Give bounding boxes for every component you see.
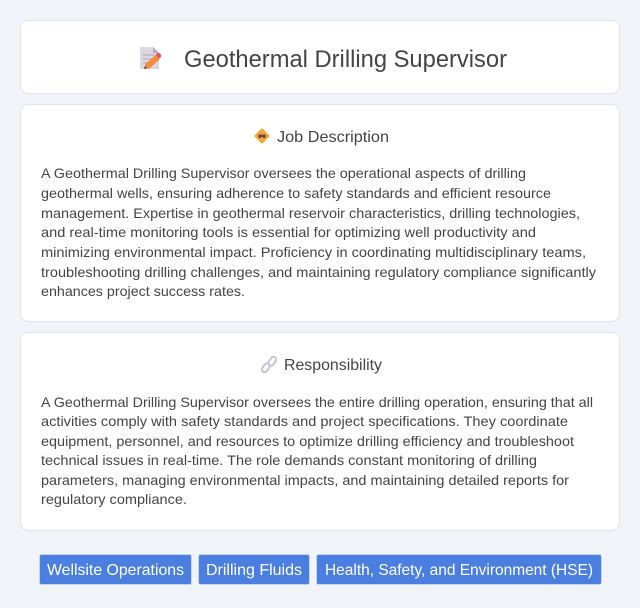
text block: job description: geothermal wells, ensuring adherence to safety standards and efficient resource [41, 185, 551, 201]
icon: document with pencil [140, 47, 161, 69]
text block: responsibility: regulatory compliance. [41, 491, 187, 507]
tag: drilling fluids [198, 554, 310, 584]
panel: responsibility [20, 332, 620, 530]
tag: health, safety, and environment: Health, Safety, and Environment (HSE) [325, 562, 593, 579]
text block: job description: and real-time monitoring tools is essential for optimizing well productivity and [41, 224, 536, 240]
text block: responsibility: equipment, personnel, and resources to optimize drilling efficiency and troubleshoot [41, 433, 574, 449]
icon: chain link [261, 356, 277, 373]
text block: job description [41, 165, 596, 299]
icon: orange diamond [254, 128, 270, 144]
tag: wellsite operations: Wellsite Operations [47, 562, 184, 579]
text block: job description: enhances project success rates. [41, 283, 245, 299]
text block: responsibility: technical issues in real-time. The role demands constant monitoring of drilling [41, 452, 537, 468]
panel: title header [20, 20, 620, 94]
text block: responsibility: A Geothermal Drilling Supervisor oversees the entire drilling operation, ensuring that all [41, 394, 593, 410]
text block: job description: minimizing environmental impact. Proficiency in coordinating multidisciplinary teams, [41, 244, 586, 260]
tag: wellsite operations [40, 554, 192, 584]
title: Geothermal Drilling Supervisor [184, 46, 507, 73]
text block: responsibility: parameters, managing environmental impacts, and maintaining detailed reports for [41, 472, 569, 488]
text block: responsibility: activities comply with safety standards and project specifications. They coordinate [41, 413, 568, 429]
panel: job description [20, 104, 620, 322]
heading: job description: Job Description [277, 129, 389, 146]
text block: job description: A Geothermal Drilling Supervisor oversees the operational aspects of drilling [41, 165, 526, 181]
tag: health, safety, and environment [316, 554, 602, 584]
text block: responsibility [41, 394, 593, 507]
text block: job description: management. Expertise in geothermal reservoir characteristics, drilling technologies, [41, 205, 580, 221]
text block: job description: troubleshooting drilling challenges, and maintaining regulatory compliance significantly [41, 264, 596, 280]
tag: drilling fluids: Drilling Fluids [206, 562, 302, 579]
heading: responsibility: Responsibility [284, 357, 382, 374]
